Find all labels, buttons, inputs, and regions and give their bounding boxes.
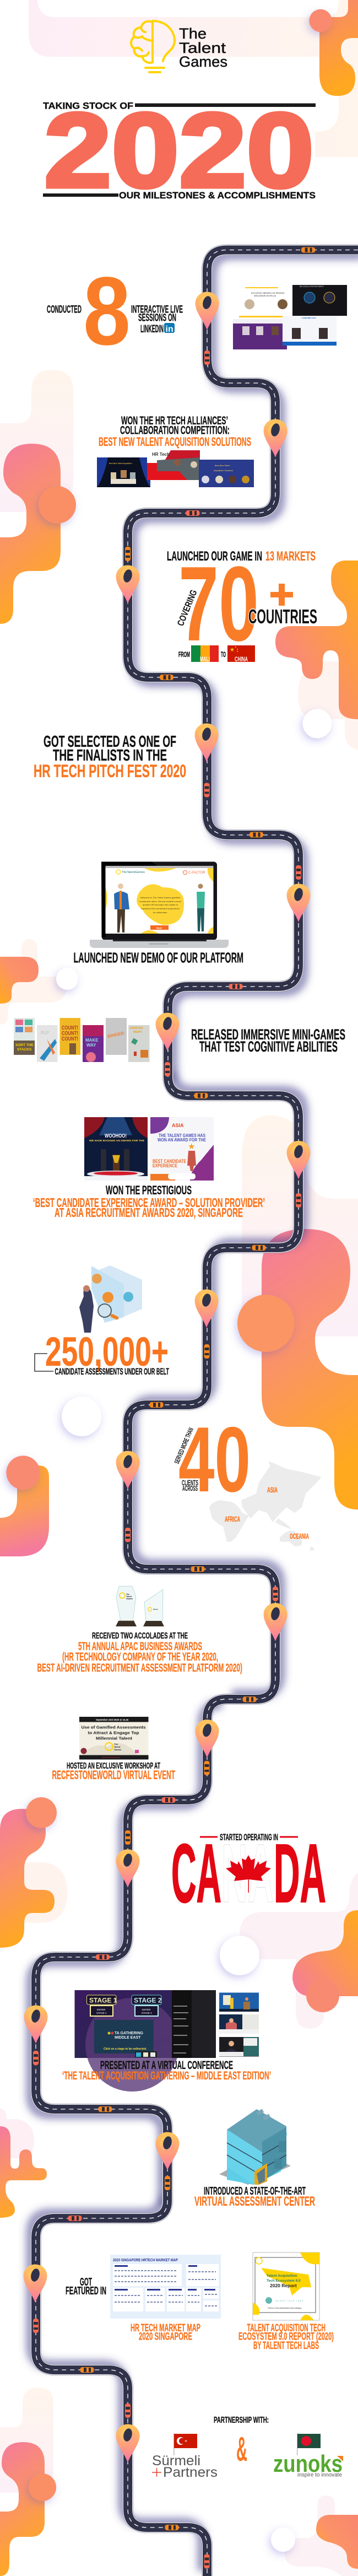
- logo: Sürmeli + Partners: Partners: [163, 2465, 218, 2480]
- heading: [191, 1026, 345, 1055]
- plus sign: [270, 584, 293, 606]
- milestone: Canada: [171, 1826, 326, 1920]
- heading: (HR TECHNOLOGY COMPANY OF THE YEAR 2020,: [62, 1651, 218, 1663]
- game cards: MAKE: [85, 1038, 99, 1043]
- big number 40: 40: [178, 1408, 251, 1511]
- conference screenshots: Click on a stage to be redirected.: [104, 2047, 147, 2051]
- conference screenshots: MIDDLE EAST: [115, 2036, 141, 2040]
- heading: [47, 304, 183, 335]
- title top line: TAKING STOCK OF: [43, 100, 133, 111]
- from Mali to China: [178, 645, 255, 663]
- heading: LINKEDIN: [140, 324, 164, 335]
- heading: [33, 1183, 265, 1220]
- game cards: BINDER: [107, 1031, 124, 1039]
- world map: [209, 1461, 322, 1551]
- milestone: 8 LinkedIn sessions: [47, 257, 347, 365]
- workshop slide: #RecFestOneWorld: [102, 1756, 120, 1759]
- award images: ★: [188, 1141, 195, 1151]
- line two: THE FINALISTS IN THE: [53, 747, 167, 764]
- from Mali to China: CHINA: [235, 655, 248, 663]
- title: [43, 91, 316, 209]
- milestone: mini-games: [14, 1018, 345, 1062]
- clients across: [182, 1479, 198, 1492]
- heading: [37, 1631, 242, 1674]
- milestone: new demo laptop: [74, 862, 243, 966]
- from Mali to China: TO: [221, 650, 226, 659]
- laptop: TheTalentGames: [122, 871, 145, 874]
- laptop: transform the recruitment experience: [141, 907, 180, 910]
- year 2020: 2020: [44, 91, 314, 209]
- banners: Best New Talent Acquisition: [109, 462, 132, 465]
- CANADA word with flag colours: NA: [221, 1826, 274, 1920]
- region labels: AFRICA: [225, 1515, 240, 1523]
- heading: [194, 2185, 315, 2209]
- illustration: building: [219, 2109, 291, 2185]
- conference screenshots: ENTER: [142, 2008, 151, 2011]
- award images: WOOHOO!: [105, 1133, 127, 1139]
- banners: HR Tech: [152, 452, 170, 457]
- workshop slide: Use of Gamified Assessments: [82, 1725, 145, 1729]
- caption: CANDIDATE ASSESSMENTS UNDER OUR BELT: [55, 1366, 169, 1377]
- location pins: [23, 292, 311, 2462]
- logo: Sürmeli + Partners: [152, 2453, 218, 2480]
- region labels: OCEANIA: [290, 1532, 309, 1540]
- laptop: Welcome to The Talent Games gamified: [140, 896, 180, 899]
- milestone: got featured: [66, 2252, 334, 2352]
- title bar left: [43, 193, 118, 197]
- milestone: RecFest workshop: [52, 1717, 175, 1782]
- trophies: The: [126, 1593, 129, 1596]
- session cards: DISCUSSION ON HR & AI: [254, 295, 276, 297]
- captions: HR TECH MARKET MAP: [131, 2322, 200, 2334]
- game cards: RIGHT: [133, 1031, 142, 1034]
- banners: [97, 450, 254, 487]
- milestone: HR Tech Pitch Fest: [34, 733, 186, 781]
- heading: INTERACTIVE LIVE: [131, 304, 183, 315]
- market map image: 2020 SINGAPORE HRTECH MARKET MAP: [113, 2259, 178, 2262]
- report image: Find us in the assessment tools category: [268, 2307, 302, 2309]
- award images: WON AN AWARD FOR THE: [158, 1138, 207, 1143]
- game cards: WAY: [86, 1043, 96, 1048]
- heading: HOSTED AN EXCLUSIVE WORKSHOP AT: [67, 1761, 160, 1771]
- partnerships: [152, 2416, 343, 2480]
- market map image: [110, 2255, 221, 2319]
- workshop slide: The: [114, 1743, 118, 1745]
- workshop slide: [79, 1717, 149, 1759]
- heading: RECFESTONEWORLD VIRTUAL EVENT: [52, 1768, 175, 1782]
- milestone: Asia Recruitment Awards: [33, 1117, 265, 1220]
- game cards: STACKS: [17, 1048, 32, 1052]
- laptop: [90, 862, 229, 948]
- featured label: [66, 2276, 106, 2297]
- laptop: recruitment demo. We are excited to meet: [139, 900, 182, 903]
- report image: [253, 2252, 319, 2320]
- heading: LAUNCHED OUR GAME IN: [167, 549, 262, 564]
- banners: Best New Talent: [215, 465, 230, 467]
- game cards: COUNT!: [62, 1031, 78, 1037]
- milestone: 13 markets, 70+ countries: [167, 544, 317, 663]
- logo: [131, 21, 227, 72]
- heading: WON THE HR TECH ALLIANCES’: [121, 414, 228, 427]
- line one: GOT SELECTED AS ONE OF: [44, 733, 176, 751]
- featured label: GOT: [80, 2276, 92, 2288]
- from Mali to China: MALI: [200, 655, 210, 663]
- heading: CONDUCTED: [47, 304, 82, 315]
- conference screenshots: TA GATHERING: [115, 2031, 144, 2035]
- icon: brain light bulb: [131, 21, 175, 72]
- brand name: The: [179, 25, 207, 42]
- award images: [84, 1117, 214, 1181]
- captions: 2020 SINGAPORE: [139, 2331, 192, 2342]
- heading: 5TH ANNUAL APAC BUSINESS AWARDS: [78, 1640, 202, 1653]
- line three: HR TECH PITCH FEST 2020: [34, 761, 186, 781]
- award images: WE HAVE BAGGED AN AWARD FOR THE: [89, 1139, 144, 1142]
- trophies: Games: [126, 1598, 133, 1600]
- report image: Tech Ecosystem 9.0: [267, 2279, 301, 2283]
- heading: 13 MARKETS: [265, 549, 316, 564]
- milestone: HR Tech Alliances: [97, 414, 254, 487]
- big number 70: 70: [178, 544, 259, 663]
- heading: COLLABORATION COMPETITION:: [120, 424, 230, 436]
- award images: ASIA: [172, 1123, 184, 1128]
- captions: [131, 2322, 334, 2352]
- flag: Bangladesh: [297, 2433, 321, 2455]
- big number 8: 8: [83, 257, 131, 365]
- illustration: reviewer and profiles: [79, 1265, 142, 1333]
- game cards: COUNT!: [62, 1025, 78, 1031]
- game cards: HAND'EM: [130, 1027, 143, 1030]
- icon: LinkedIn: [164, 323, 175, 334]
- clients across: CLIENTS: [182, 1479, 198, 1487]
- title bar right: [135, 104, 316, 107]
- milestone: TA Gathering virtual conference: [62, 1990, 271, 2092]
- milestone: APAC Business Awards: [37, 1586, 242, 1674]
- brand name: [179, 25, 227, 70]
- conference screenshots: STAGE 1: [89, 1996, 117, 2004]
- laptop: another HR innovator who wants to: [143, 903, 178, 906]
- region labels: [225, 1485, 309, 1540]
- covering label: COVERING: [175, 588, 199, 627]
- served more than: SERVED MORE THAN: [173, 1426, 195, 1465]
- workshop slide: Talent: [114, 1745, 121, 1748]
- session cards: LinkedIn Live: [302, 316, 316, 319]
- bracket: [35, 1354, 53, 1371]
- featured label: FEATURED IN: [66, 2285, 106, 2297]
- workshop slide: September 23rd 2020 @ 15.45: [96, 1718, 129, 1721]
- workshop slide: Games: [114, 1748, 122, 1751]
- heading: STARTED OPERATING IN: [220, 1832, 278, 1842]
- banners: Acquisition Solutions: [214, 470, 233, 472]
- big number: 250,000+: [45, 1329, 169, 1375]
- report image: Talent Acquisition: [267, 2274, 297, 2278]
- from Mali to China: ★: [230, 647, 235, 653]
- heading: SESSIONS ON: [138, 312, 176, 324]
- conference screenshots: STAGE 2: [134, 1996, 162, 2004]
- icon: maple leaf: [226, 1855, 271, 1893]
- award images: THE TALENT GAMES HAS: [159, 1133, 206, 1138]
- conference screenshots: STAGE 2: [142, 2012, 152, 2014]
- clients across: ACROSS: [182, 1484, 198, 1492]
- partnerships: &: [236, 2431, 247, 2469]
- conference screenshots: STAGE 1: [96, 2012, 107, 2014]
- trophies: [116, 1586, 164, 1626]
- workshop slide: to Attract & Engage Top: [88, 1731, 139, 1735]
- brand name: Games: [179, 53, 227, 70]
- award images: EXPERIENCE: [153, 1163, 177, 1168]
- heading: WON THE PRESTIGIOUS: [106, 1183, 192, 1197]
- milestone: 40 clients across regions: [173, 1408, 322, 1551]
- logo: zunoks: inspire to innovate: [297, 2472, 342, 2478]
- report image: TALENT TECH LABS: [275, 2300, 303, 2302]
- milestone: 250,000+ assessments: [35, 1265, 169, 1377]
- heading: [52, 1761, 175, 1782]
- game cards: [14, 1018, 150, 1062]
- heading: [99, 414, 251, 449]
- trophies: Talent: [153, 1608, 158, 1610]
- brand name: Talent: [179, 40, 226, 56]
- game cards: SORT THE: [15, 1043, 34, 1047]
- award images: BEST CANDIDATE: [153, 1158, 186, 1164]
- session cards: [233, 285, 347, 349]
- CANADA word with flag colours: CA: [171, 1826, 221, 1920]
- conference screenshots: ENTER: [97, 2008, 106, 2011]
- conference screenshots: [75, 1990, 259, 2092]
- heading: RECEIVED TWO ACCOLADES AT THE: [92, 1631, 188, 1641]
- game cards: COUNT!: [62, 1036, 78, 1042]
- game cards: FLIP: [41, 1031, 49, 1035]
- cars on the road: [33, 247, 315, 2568]
- title bottom line: OUR MILESTONES & ACCOMPLISHMENTS: [119, 190, 316, 201]
- heading: PRESENTED AT A VIRTUAL CONFERENCE: [100, 2059, 233, 2072]
- red rules: [200, 1836, 298, 1837]
- logo: Sürmeli + Partners: Sürmeli: [152, 2453, 200, 2469]
- report image: 2020 Report: [270, 2283, 297, 2288]
- trophies: Talent: [126, 1596, 132, 1598]
- logo: zunoks: zunoks: [273, 2450, 343, 2477]
- heading: PARTNERSHIP WITH:: [214, 2416, 269, 2425]
- session cards: EXCLUSIVE LINKEDIN LIVE SESSION: [251, 292, 284, 294]
- icon: LinkedIn: in: [165, 325, 173, 334]
- from Mali to China: FROM: [178, 650, 190, 659]
- flag: Turkey: [173, 2433, 197, 2455]
- laptop: C-FACTOR: [188, 871, 205, 875]
- laptop: for millennials.: [153, 911, 167, 914]
- session cards: BIG DATA & RECRUITMENT: [300, 285, 324, 288]
- milestone: virtual assessment center: [194, 2109, 315, 2209]
- heading: [62, 2059, 271, 2082]
- workshop slide: Millennial Talent: [96, 1736, 133, 1740]
- laptop: Next: [156, 927, 162, 929]
- region labels: ASIA: [267, 1485, 278, 1494]
